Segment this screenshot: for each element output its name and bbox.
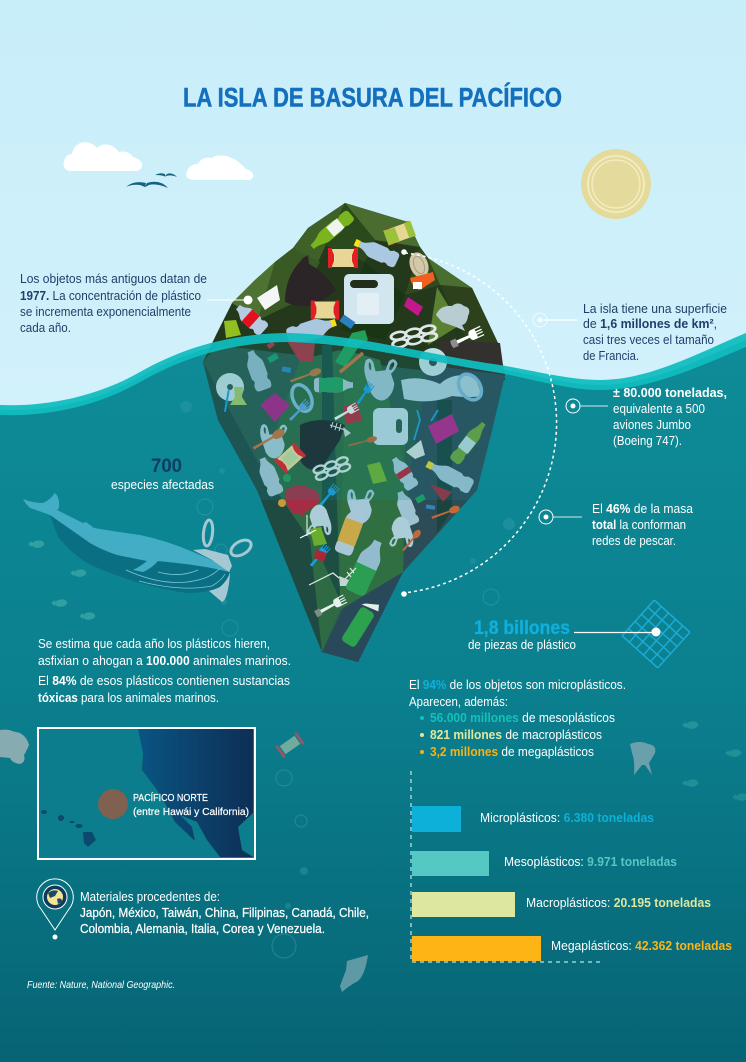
- net leader line: [574, 628, 660, 636]
- dotted arc callout line: [403, 253, 557, 593]
- plastic bag: [364, 359, 398, 400]
- text: animals harmed: [38, 637, 291, 705]
- text: oldest objects: [20, 272, 207, 335]
- green cup and bag: [300, 515, 327, 546]
- bar: megaplastics: Megaplásticos: 42.362 toneladas: [551, 939, 732, 953]
- map: North Pacific: [38, 728, 255, 859]
- trash island: [203, 203, 505, 662]
- title: LA ISLA DE BASURA DEL PACÍFICO: [183, 82, 562, 112]
- red balloon: [285, 485, 319, 517]
- black garbage bag: [285, 255, 336, 306]
- bag behind whale: [208, 573, 230, 602]
- icon: cloud right: [186, 155, 253, 180]
- sky background: [0, 0, 746, 420]
- fish bone and wire: [309, 568, 356, 586]
- text: oldest objects: se incrementa exponencialmente: [20, 305, 191, 319]
- wine bottle: [308, 209, 355, 252]
- fork with bulb: [329, 393, 373, 436]
- bar: microplastics: Microplásticos: 6.380 toneladas: [480, 811, 654, 825]
- green bottle bottom: [340, 597, 382, 649]
- long bottle: [423, 457, 475, 494]
- text: tonnage: aviones Jumbo: [613, 418, 691, 432]
- text: fishing nets: total la conforman: [592, 518, 686, 532]
- stat: pieces of plastic: 1,8 billones: [474, 618, 570, 639]
- green bag: [335, 330, 368, 367]
- text: tonnage: equivalente a 500: [613, 402, 705, 416]
- text: tonnage: [613, 386, 727, 448]
- blue fork: [287, 399, 311, 423]
- Hawaiian islands: [41, 810, 96, 847]
- bag and spoon: [251, 424, 287, 458]
- pink cup under water: [260, 393, 290, 422]
- text: fishing nets: [592, 502, 693, 548]
- icon: location pin with globe: [37, 879, 73, 940]
- styrofoam box: [257, 285, 280, 310]
- bar: microplastics: [412, 806, 654, 832]
- callout dot top: [401, 249, 407, 255]
- facets above water: [232, 203, 505, 385]
- text: animals harmed: Se estima que cada año los plásticos hieren,: [38, 637, 270, 651]
- spoon right: [431, 504, 461, 521]
- CD and pear core: [216, 373, 247, 412]
- apple core: [328, 248, 358, 268]
- stat: pieces of plastic: de piezas de plástico: [468, 638, 576, 652]
- text: microplastic list: 56.000 millones de mesoplásticos: [430, 711, 615, 725]
- text: surface: de Francia.: [583, 349, 639, 363]
- white fork: [449, 326, 484, 349]
- text: origin of materials: Materiales procedentes de:: [80, 890, 220, 904]
- garbage patch marker: [98, 789, 128, 819]
- text: surface: de 1,6 millones de km²,: [583, 317, 717, 331]
- crumpled glove: [401, 375, 482, 401]
- stat: 700 species: 700: [151, 456, 182, 477]
- bottle red stripe: [388, 454, 419, 492]
- clear bottle: [243, 348, 272, 393]
- spoon: [289, 367, 322, 385]
- six-pack rings: [390, 324, 437, 349]
- text: microplastic list: El 94% de los objetos son microplásticos.: [409, 678, 626, 692]
- icon: birds: [126, 173, 177, 188]
- text: surface: [583, 302, 727, 363]
- text: animals harmed: tóxicas para los animales marinos.: [38, 691, 219, 705]
- icon: sun: [581, 149, 651, 219]
- facets under water: [203, 345, 505, 662]
- pink cup lower: [428, 414, 459, 444]
- floating plastic silhouettes: [0, 730, 655, 992]
- bottle with yellow cap: [352, 235, 400, 268]
- text: tonnage: ± 80.000 toneladas,: [613, 386, 727, 400]
- text: oldest objects: cada año.: [20, 321, 71, 335]
- central bottle with bag: [334, 489, 374, 557]
- whale body: [23, 493, 230, 572]
- map land: [138, 729, 253, 857]
- callout node: tonnage: [566, 399, 608, 413]
- whale with plastic bag: [23, 493, 254, 602]
- blue fork lower: [317, 483, 340, 508]
- blue fork with red block: [308, 543, 331, 568]
- bar chart: tonnes by size: [411, 771, 732, 962]
- map label: PACÍFICO NORTE: [133, 791, 208, 804]
- green cup lower: [367, 462, 387, 484]
- crumpled plastic: [436, 304, 469, 331]
- orange knife: [339, 352, 364, 374]
- text: microplastic list: 3,2 millones de megaplásticos: [430, 745, 594, 759]
- wine bottle under water: [449, 419, 489, 466]
- green and orange bubbles: [278, 474, 291, 507]
- text: origin of materials: Colombia, Alemania, Italia, Corea y Venezuela.: [80, 922, 325, 936]
- text: surface: La isla tiene una superficie: [583, 302, 727, 316]
- map label: (entre Hawái y California): [133, 807, 249, 818]
- text: oldest objects: Los objetos más antiguos datan de: [20, 272, 207, 286]
- fragments right: [415, 494, 435, 510]
- small fragments: [266, 341, 291, 373]
- water tint over island: [0, 342, 746, 500]
- apple core under water: [274, 442, 306, 474]
- bar: mesoplastics: Mesoplásticos: 9.971 toneladas: [504, 855, 677, 869]
- source: Fuente: Nature, National Geographic.: [27, 980, 175, 991]
- text: oldest objects: 1977. La concentración de plástico: [20, 289, 201, 303]
- text: surface: casi tres veces el tamaño: [583, 333, 714, 347]
- text: tonnage: (Boeing 747).: [613, 434, 682, 448]
- callout node: fishing nets: [539, 510, 582, 524]
- bar: megaplastics: [412, 936, 732, 961]
- six-pack rings lower: [313, 456, 351, 481]
- small styrofoam: [406, 440, 425, 459]
- text: fishing nets: redes de pescar.: [592, 534, 676, 548]
- callout leader: oldest objects: [207, 296, 252, 304]
- black bag under water: [300, 420, 345, 470]
- green bottle: [314, 378, 353, 392]
- wave band: [0, 333, 746, 415]
- green cup: [224, 320, 241, 338]
- map label: [133, 791, 249, 818]
- icon: cloud left: [64, 142, 142, 171]
- text: animals harmed: El 84% de esos plásticos contienen sustancias: [38, 674, 290, 688]
- red triangle: [430, 484, 452, 502]
- text: fishing nets: El 46% de la masa: [592, 502, 693, 516]
- bottle with red label: [233, 301, 269, 337]
- stat: 700 species: [111, 456, 214, 492]
- stat: 700 species: especies afectadas: [111, 478, 214, 492]
- ring: [288, 382, 316, 414]
- jug under water: [373, 408, 408, 445]
- tin can: [406, 250, 435, 290]
- toilet paper roll: [419, 348, 447, 376]
- red plastic: [287, 341, 315, 362]
- bar: macroplastics: [412, 892, 711, 917]
- whale belly: [50, 515, 230, 593]
- clear bottle lower right: [393, 489, 420, 527]
- fish bone: [330, 422, 351, 437]
- pear core: [383, 220, 416, 246]
- text: origin of materials: Japón, México, Taiwán, China, Filipinas, Canadá, Chile,: [80, 906, 369, 920]
- bar: macroplastics: Macroplásticos: 20.195 toneladas: [526, 896, 711, 910]
- big bottle: [344, 537, 388, 597]
- plastic jug: [344, 274, 394, 324]
- fork with bulb lower: [314, 594, 347, 618]
- callout dot bottom: [401, 591, 407, 597]
- stat: pieces of plastic: [468, 618, 576, 652]
- text: microplastic list: 821 millones de macroplásticos: [430, 728, 602, 742]
- whale belly lines: [126, 568, 225, 588]
- text: origin of materials: [80, 890, 369, 936]
- bottle with yellow cap 2: [285, 313, 339, 347]
- ocean background: [0, 337, 746, 1062]
- small spoon: [348, 435, 378, 448]
- plastic bag on whale head: [193, 520, 254, 572]
- text: microplastic list: [409, 678, 626, 759]
- pink cup: [404, 297, 423, 316]
- background fish and bubbles: [28, 401, 746, 958]
- bag center left: [307, 505, 331, 535]
- apple core 2: [311, 300, 339, 320]
- bar: mesoplastics: [412, 851, 677, 876]
- blue fork 2: [354, 381, 375, 406]
- blue block: [339, 314, 355, 329]
- bag center right and spoon: [389, 517, 422, 553]
- blue ring: [454, 370, 486, 404]
- callout node: surface: [533, 313, 577, 327]
- blue straws: [414, 410, 438, 440]
- island silhouette: [203, 203, 505, 662]
- text: microplastic list: Aparecen, además:: [409, 695, 508, 709]
- text: animals harmed: asfixian o ahogan a 100.000 animales marinos.: [38, 654, 291, 668]
- bottle clear lower: [255, 455, 284, 497]
- icon: fishing net: [622, 600, 690, 668]
